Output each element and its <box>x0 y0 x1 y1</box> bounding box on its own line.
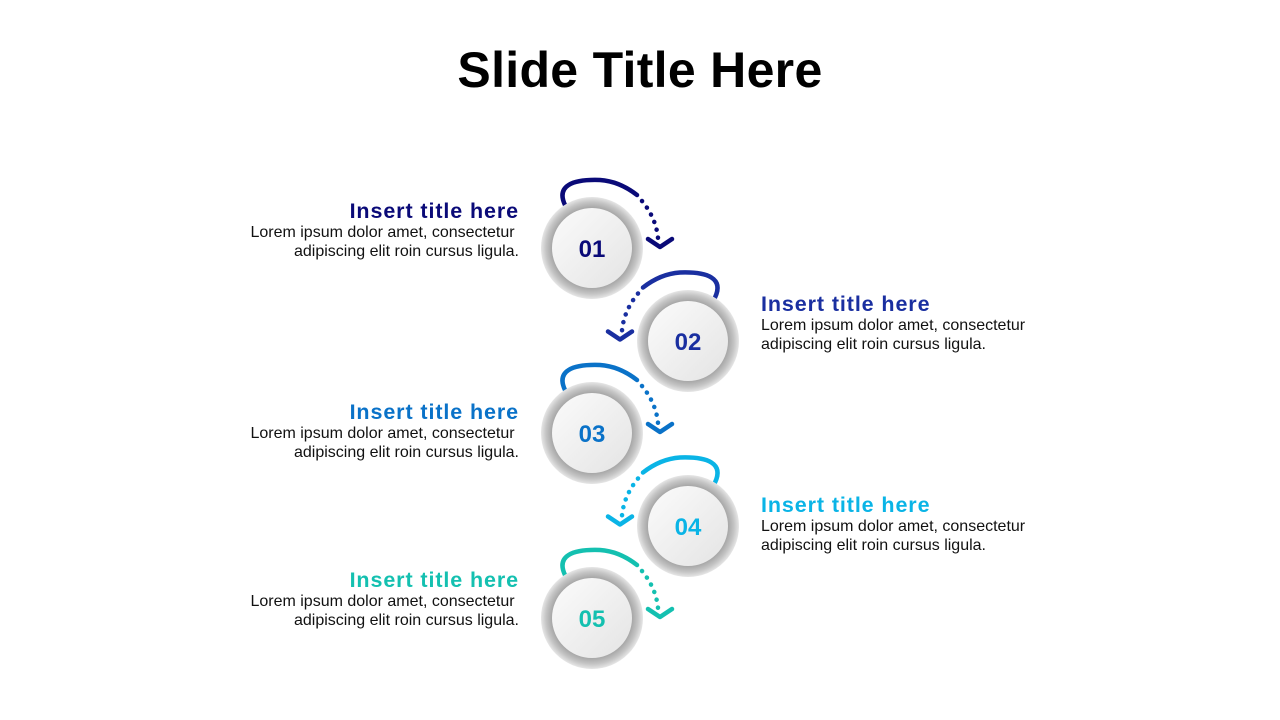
text 03: Lorem ipsum dolor amet, consectetur <box>250 425 515 442</box>
text 04: adipiscing elit roin cursus ligula. <box>761 537 986 554</box>
step 01 <box>541 180 672 299</box>
text 05: Insert title here <box>350 568 519 592</box>
text 04: Insert title here <box>761 493 930 517</box>
text 03: Insert title here <box>350 400 519 424</box>
text 03 <box>250 400 519 461</box>
text 02: Lorem ipsum dolor amet, consectetur <box>761 317 1025 334</box>
step 05: 05 <box>579 606 605 633</box>
text 01 <box>250 199 519 260</box>
step 03 <box>541 365 672 484</box>
text 01: Lorem ipsum dolor amet, consectetur <box>250 224 515 241</box>
text 05: Lorem ipsum dolor amet, consectetur <box>250 593 515 610</box>
step 01: 01 <box>579 236 605 263</box>
title: Slide Title Here <box>457 42 823 98</box>
step 05 <box>541 550 672 669</box>
text 02: adipiscing elit roin cursus ligula. <box>761 336 986 353</box>
text 04 <box>761 493 1025 554</box>
text 02 <box>761 292 1025 353</box>
text 05 <box>250 568 519 629</box>
step 02: 02 <box>675 329 701 356</box>
text 04: Lorem ipsum dolor amet, consectetur <box>761 518 1025 535</box>
step 03: 03 <box>579 421 605 448</box>
step 04: 04 <box>675 514 702 541</box>
text 05: adipiscing elit roin cursus ligula. <box>294 612 519 629</box>
step 04 <box>608 457 739 577</box>
text 01: Insert title here <box>350 199 519 223</box>
text 01: adipiscing elit roin cursus ligula. <box>294 243 519 260</box>
text 02: Insert title here <box>761 292 930 316</box>
step 02 <box>608 272 739 392</box>
text 03: adipiscing elit roin cursus ligula. <box>294 444 519 461</box>
